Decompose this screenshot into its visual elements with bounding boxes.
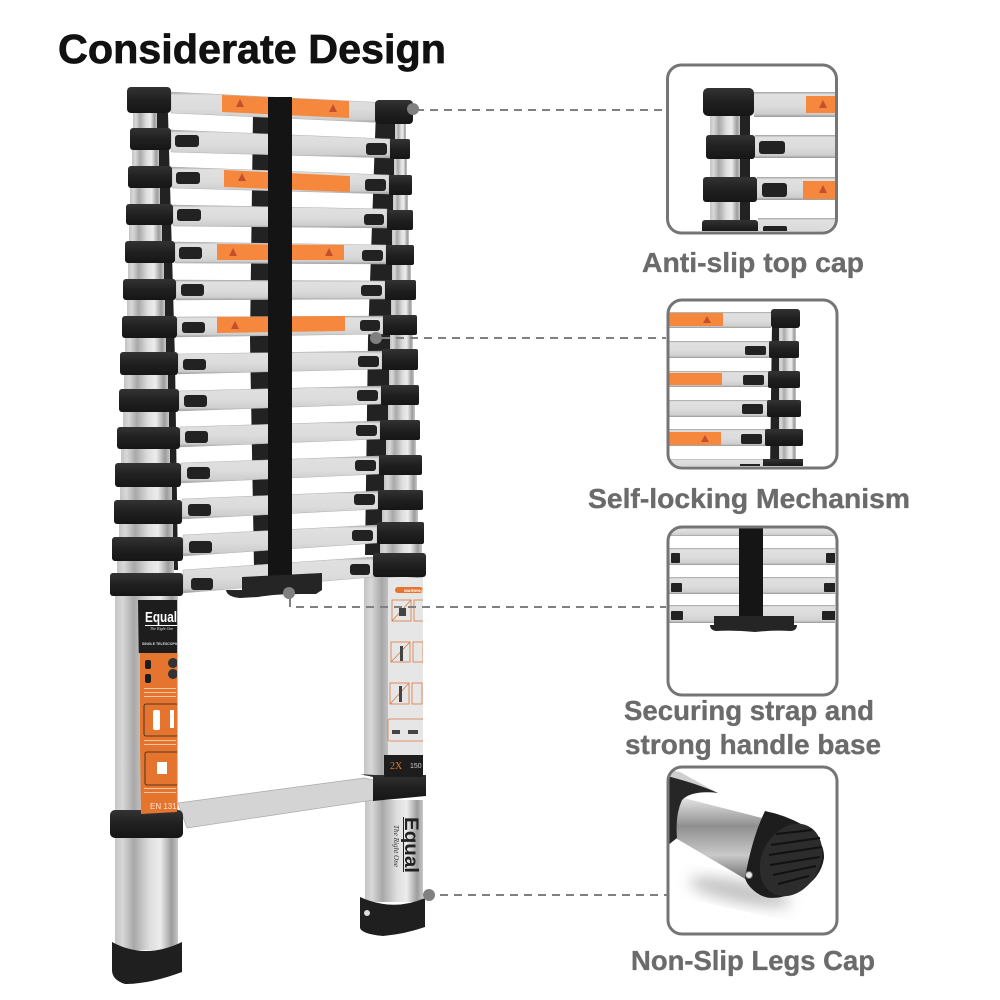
ladder: left tube sticker [138,600,177,814]
panel: non-slip legs cap [667,767,837,934]
ladder: left tube sticker: Equal [145,609,177,626]
caption: non-slip legs cap: Non-Slip Legs Cap [631,945,875,976]
caption: securing strap and handle base [624,695,881,760]
caption: securing strap and handle base: Securing strap and [624,695,874,726]
leader: self-locking mechanism [370,332,666,344]
ladder: left tube sticker: The Right One [150,626,174,631]
ladder: left tube sticker: EN 131 [150,802,177,811]
leader: non-slip legs cap [423,889,668,901]
ladder: dark sliders behind rungs [155,110,396,570]
panel: anti-slip top cap [668,65,836,238]
caption: anti-slip top cap: Anti-slip top cap [642,247,864,278]
ladder: left tube sticker: SINGLE TELESCOPIC LADDER [142,642,194,646]
ladder: right tube warning sticker: WARNING [404,588,423,593]
ladder: central strap [268,97,292,577]
caption: self-locking mechanism: Self-locking Mechanism [588,483,910,514]
ladder [110,87,426,984]
ladder: vertical brand on right leg [392,817,421,873]
ladder: left collars [110,87,183,838]
ladder: vertical brand on right leg: Equal [400,817,421,873]
leader: securing strap [283,587,666,607]
ladder: right tube warning sticker: 150 [410,763,422,770]
caption: securing strap and handle base: strong handle base [625,729,881,760]
ladder: right collars [360,100,426,801]
panel: securing strap and handle [668,526,838,695]
ladder: right tube warning sticker: 2X [390,761,403,772]
panel: self-locking mechanism [668,300,837,470]
ladder: orange warning stickers [217,95,350,333]
ladder: rungs [171,92,390,593]
ladder: right tube warning sticker [384,578,424,777]
ladder: vertical brand on right leg: The Right One [392,825,400,867]
leader: anti-slip top cap [407,103,664,115]
ladder: handle base [226,573,322,598]
ladder: left foot [112,942,182,984]
ladder: right telescopic tube [364,122,423,902]
title: Considerate Design [58,26,446,72]
ladder: crossbar [178,778,374,828]
ladder: right foot [360,897,425,936]
ladder: left telescopic tube [115,113,178,950]
ladder: rung locking tabs [175,135,387,590]
